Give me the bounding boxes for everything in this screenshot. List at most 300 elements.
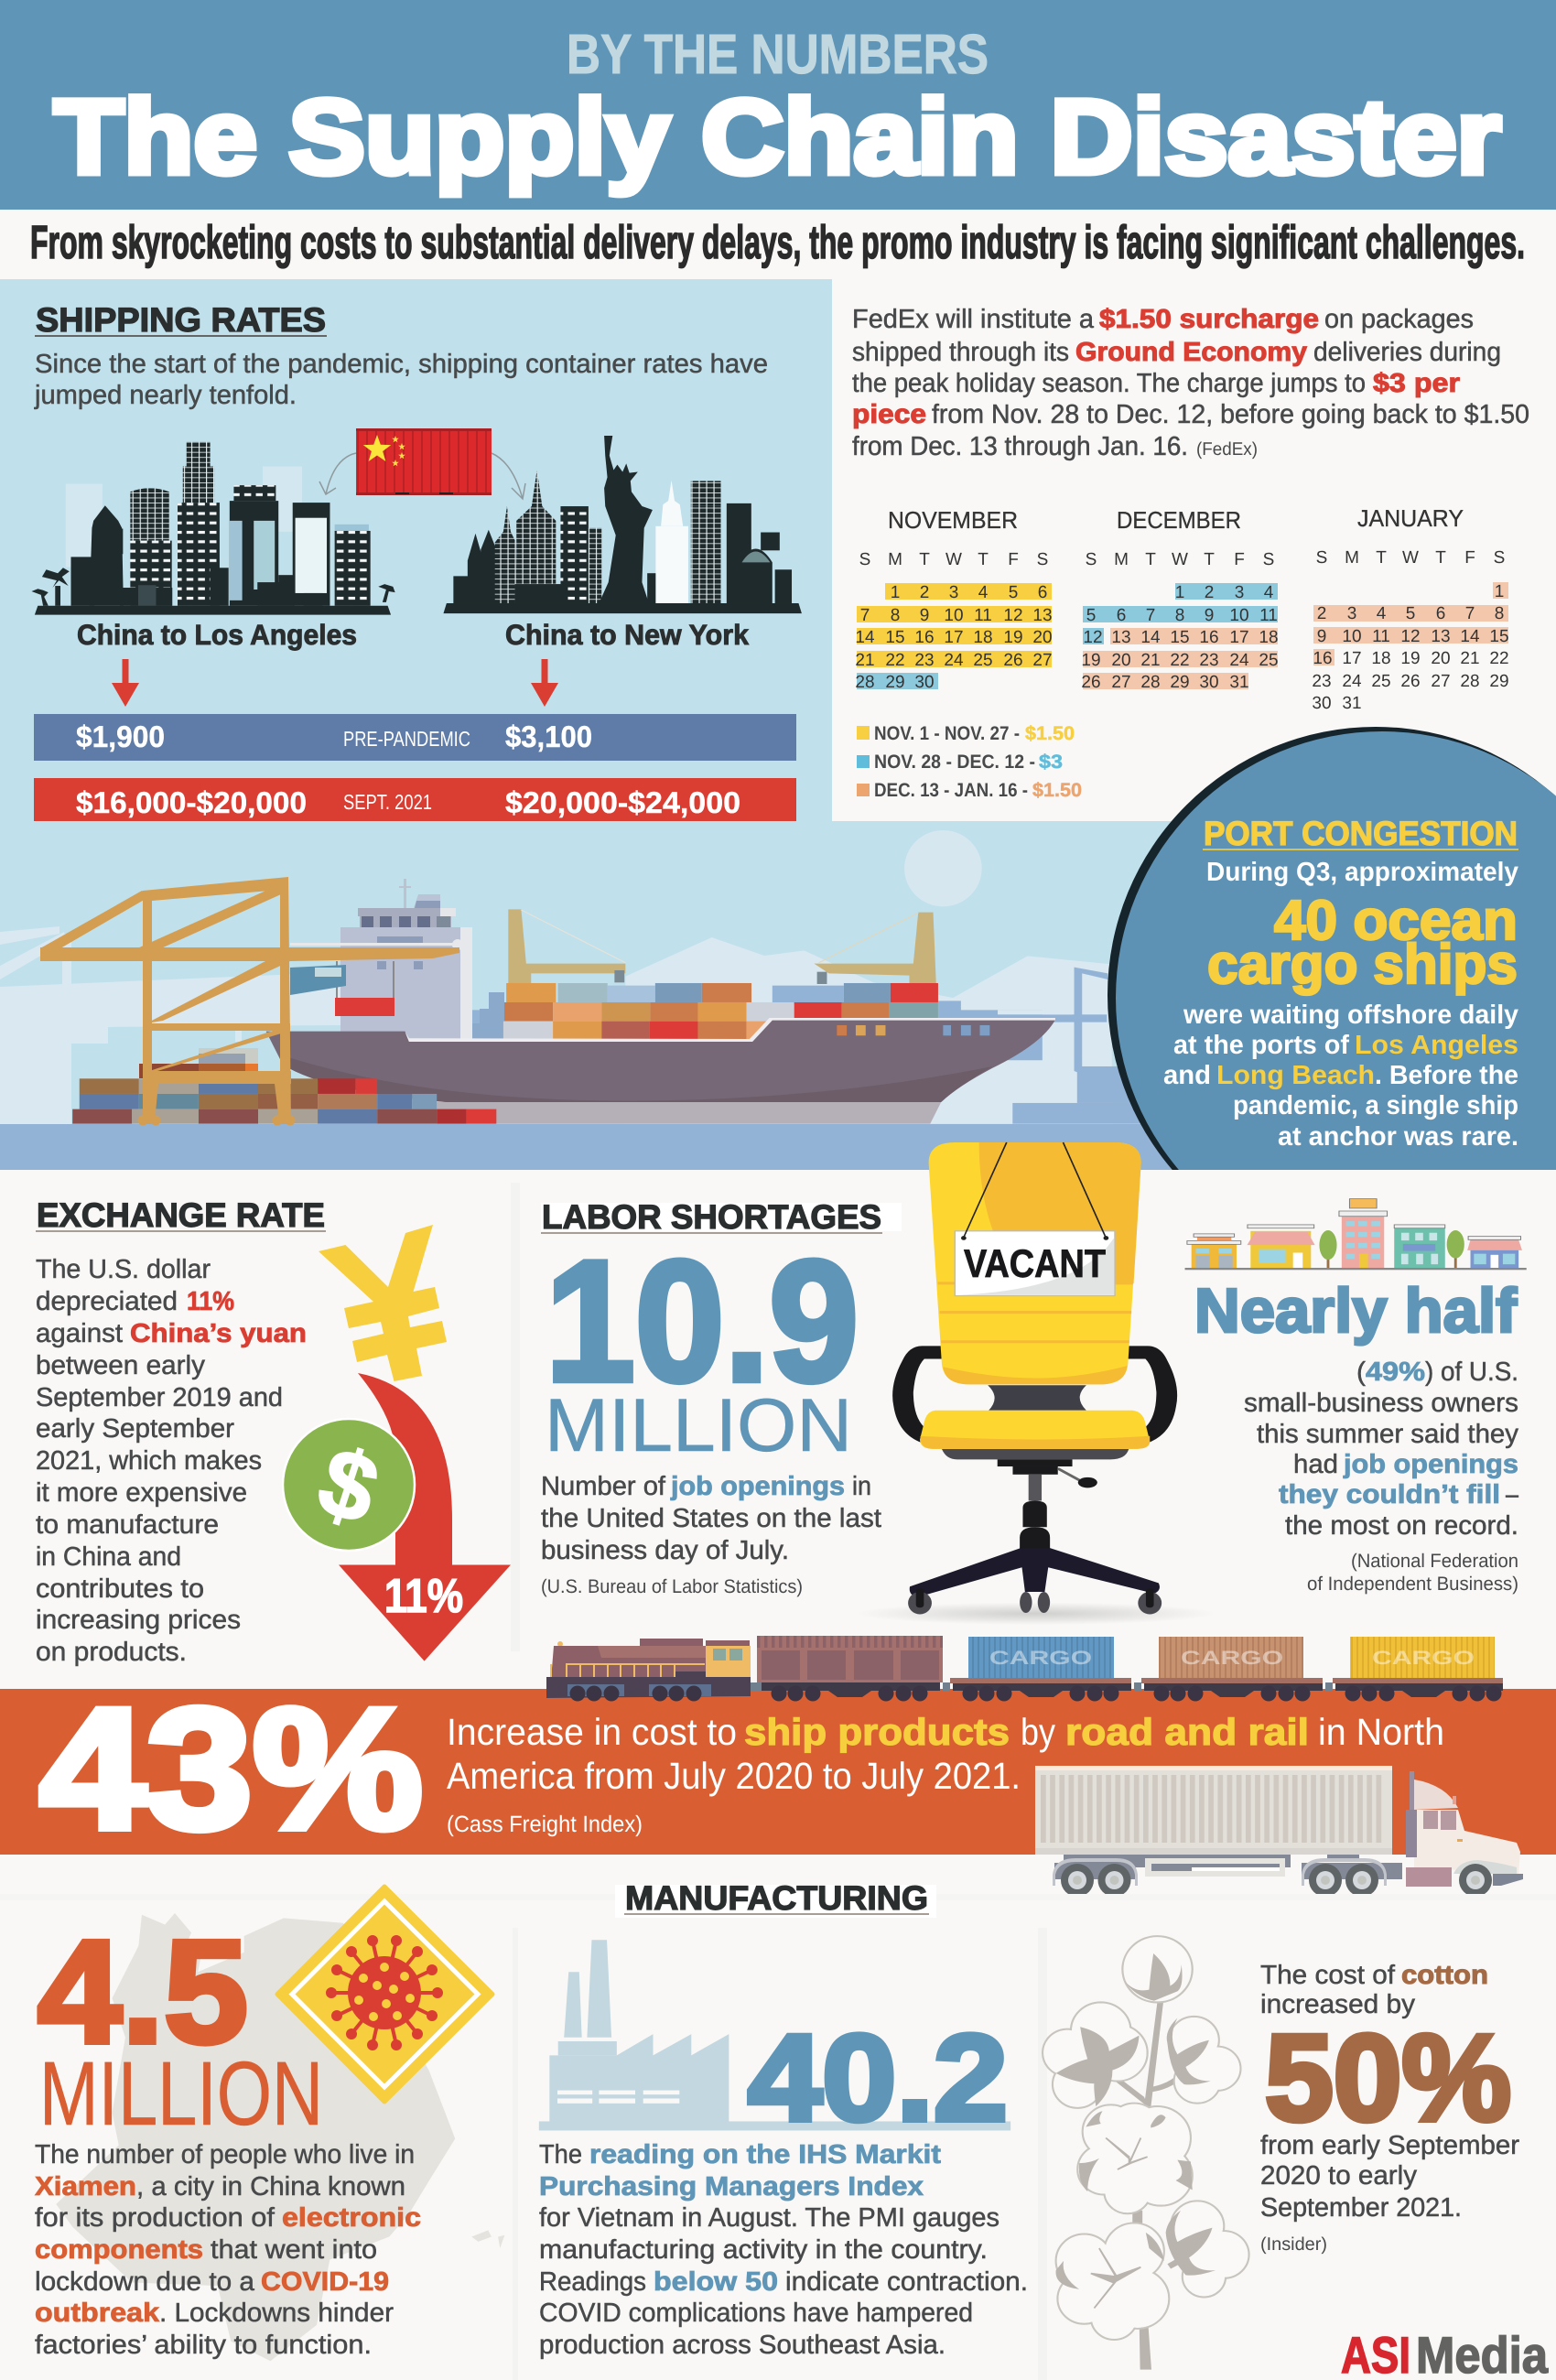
panel: small business <box>1185 1199 1527 1595</box>
bar: September 2021 rates: $16,000-$20,000 <box>76 785 307 819</box>
text: FedEx surcharge: from Dec. 13 through Jan. 16. <box>852 432 1188 461</box>
calendar: January: S <box>1316 548 1327 568</box>
text: job openings <box>541 1472 881 1597</box>
text: PMI reading: Readings <box>539 2267 646 2297</box>
bar: pre-pandemic rates: PRE-PANDEMIC <box>343 727 470 751</box>
calendar: January: 2 <box>1317 604 1326 623</box>
kicker: by the numbers: BY THE NUMBERS <box>567 23 989 85</box>
text: job openings: Number of <box>541 1472 666 1501</box>
skyline: Los Angeles <box>31 442 395 615</box>
panel: Xiamen lockdown <box>35 1887 504 2361</box>
calendar legend: $1.50 <box>1025 723 1075 744</box>
text: small business owners: ( <box>1356 1358 1366 1387</box>
text: cost of cotton <box>1260 1961 1488 2019</box>
calendar: November: W <box>945 550 962 569</box>
text: Xiamen: electronic <box>282 2203 421 2233</box>
calendar: November: 15 <box>885 628 905 647</box>
text: PMI reading: below 50 <box>654 2267 778 2297</box>
text: PMI reading: production across Southeast Asia. <box>539 2331 945 2360</box>
panel: cotton <box>1043 1936 1549 2380</box>
calendar: November: 6 <box>1038 583 1047 602</box>
calendar: December: 9 <box>1205 606 1214 625</box>
calendar: January: 25 <box>1371 672 1391 691</box>
calendar: November: 9 <box>920 606 929 625</box>
text: exchange rate body: between early <box>36 1351 206 1380</box>
stat: 50 percent: 50% <box>1265 2010 1511 2147</box>
illustration: semi truck <box>1035 1766 1523 1897</box>
calendar: December: 16 <box>1199 628 1219 647</box>
big text: 40 ocean cargo ships <box>1207 889 1518 995</box>
calendar: December: 24 <box>1229 651 1249 670</box>
text: FedEx surcharge: $3 per <box>1373 369 1460 398</box>
icon: dollar coin: $ <box>307 1427 390 1545</box>
calendar: November: NOVEMBER <box>888 506 1018 534</box>
text: offshore detail: and <box>1163 1061 1211 1090</box>
text: cost increase: Increase in cost to <box>447 1711 737 1753</box>
text: exchange rate body: it more expensive <box>36 1478 247 1508</box>
big text: 40 ocean cargo ships: cargo ships <box>1207 933 1518 995</box>
calendar: December: 28 <box>1140 673 1161 692</box>
calendar: December: W <box>1172 550 1188 569</box>
text: Xiamen: lockdown due to a <box>35 2267 255 2297</box>
stat unit: million: MILLION <box>39 2042 323 2144</box>
text: Xiamen: Xiamen <box>35 2172 136 2202</box>
calendar: January: 10 <box>1342 627 1362 646</box>
calendar: December: 5 <box>1086 606 1096 625</box>
text: exchange rate body: September 2019 and <box>36 1383 283 1412</box>
text: exchange rate body: early September <box>36 1414 234 1444</box>
text: exchange rate body: depreciated <box>36 1287 178 1316</box>
text: PMI reading: COVID complications have hampered <box>539 2299 973 2328</box>
calendar: November: 17 <box>944 628 964 647</box>
text: small business owners: this summer said they <box>1257 1420 1519 1449</box>
calendar legend <box>857 723 1082 801</box>
text: small business owners: – <box>1506 1480 1519 1509</box>
calendar: November: 2 <box>920 583 929 602</box>
calendar: January: 11 <box>1372 627 1390 646</box>
calendar: December: T <box>1145 550 1156 569</box>
calendar legend: NOV. 28 - DEC. 12 - <box>874 752 1035 773</box>
text: exchange rate body: contributes to <box>36 1574 204 1604</box>
text: Xiamen <box>35 2140 421 2360</box>
text: small business owners: the most on record. <box>1285 1511 1518 1541</box>
pale background cranes <box>0 926 340 1124</box>
calendar: January: 12 <box>1400 627 1421 646</box>
text: Xiamen: The number of people who live in <box>35 2140 415 2169</box>
calendar: December: 12 <box>1083 628 1103 647</box>
text: small business owners: 49% <box>1366 1358 1425 1387</box>
calendar: November: 7 <box>860 606 870 625</box>
text: FedEx surcharge: Ground Economy <box>1075 338 1307 367</box>
calendar: January: 24 <box>1342 672 1362 691</box>
big text: 40 ocean cargo ships: 40 ocean <box>1274 889 1518 951</box>
calendar: January: 19 <box>1400 649 1421 668</box>
calendar: November: 28 <box>855 673 875 692</box>
calendar: December: 20 <box>1111 651 1131 670</box>
calendar: November: 25 <box>973 651 993 670</box>
text: job openings: the United States on the last <box>541 1504 881 1533</box>
map: Xiamen outline <box>56 1913 504 2361</box>
calendar: December: 21 <box>1140 651 1161 670</box>
illustration: vacant office chair <box>857 1142 1216 1625</box>
calendar: December: 22 <box>1170 651 1190 670</box>
text: cost increase: (Cass Freight Index) <box>447 1812 643 1837</box>
calendar: January: 26 <box>1400 672 1421 691</box>
calendar: December: 15 <box>1170 628 1190 647</box>
calendar: January: 1 <box>1495 582 1504 601</box>
heading: exchange rate: EXCHANGE RATE <box>37 1196 325 1234</box>
calendar: January: T <box>1376 548 1387 568</box>
text: FedEx surcharge: FedEx will institute a <box>852 305 1095 334</box>
text: PMI reading: indicate contraction. <box>785 2267 1028 2297</box>
calendar: November: 22 <box>885 651 905 670</box>
panel: FedEx surcharge <box>832 279 1556 821</box>
text: offshore detail: . Before the <box>1375 1061 1518 1090</box>
calendar: January: JANUARY <box>1357 504 1464 532</box>
calendar: December: 14 <box>1140 628 1161 647</box>
text: cost increase: ship products <box>744 1711 1010 1753</box>
illustration: port scene <box>0 821 1556 1170</box>
calendar: December: S <box>1086 550 1097 569</box>
yellow container car <box>1325 1637 1503 1701</box>
icon: virus warning sign <box>277 1887 492 2102</box>
container labels <box>989 1648 1475 1669</box>
text: cost increase: America from July 2020 to July 2021. <box>447 1755 1021 1797</box>
bar: September 2021 rates: SEPT. 2021 <box>343 790 432 814</box>
calendar: January: 13 <box>1431 627 1451 646</box>
calendar: January: 7 <box>1465 604 1475 623</box>
locomotive <box>546 1639 751 1701</box>
text: exchange rate body: 11% <box>187 1287 234 1316</box>
calendar: January: 6 <box>1436 604 1445 623</box>
text: FedEx surcharge: (FedEx) <box>1196 439 1258 460</box>
divider: exchange and labor columns <box>511 1183 520 1651</box>
calendar: January: 28 <box>1460 672 1480 691</box>
calendar: January: 16 <box>1313 649 1333 668</box>
text: FedEx surcharge: from Nov. 28 to Dec. 12, before going back to $1.50 <box>932 400 1529 429</box>
calendar: January: S <box>1494 548 1505 568</box>
curved arrow to New York <box>492 453 525 499</box>
calendar: January: 30 <box>1312 694 1332 713</box>
bar: pre-pandemic rates <box>34 714 796 761</box>
calendar: December: 29 <box>1170 673 1190 692</box>
text: exchange rate body: 2021, which makes <box>36 1446 262 1476</box>
text: PMI reading: The <box>539 2140 582 2169</box>
text: job openings: job openings <box>670 1472 845 1501</box>
text: PMI reading: for Vietnam in August. The PMI gauges <box>539 2203 1000 2233</box>
text: job openings: business day of July. <box>541 1536 789 1565</box>
calendar: December <box>1081 506 1279 692</box>
cargo ship <box>266 879 1055 1124</box>
intro text <box>34 350 768 410</box>
calendar: November: F <box>1008 550 1019 569</box>
calendar: November: 11 <box>974 606 992 625</box>
calendar: January: 4 <box>1377 604 1387 623</box>
calendar: January: 20 <box>1431 649 1451 668</box>
text: small business owners: ) of U.S. <box>1425 1358 1518 1387</box>
text: exchange rate body <box>36 1255 307 1667</box>
text: FedEx surcharge: the peak holiday season. The charge jumps to <box>852 369 1366 398</box>
label: China to New York: China to New York <box>505 619 750 651</box>
text: cost increase: by <box>1021 1711 1055 1753</box>
text: exchange rate body: on products. <box>36 1638 187 1667</box>
text: job openings: (U.S. Bureau of Labor Statistics) <box>541 1576 803 1597</box>
text: cost increase: in North <box>1318 1711 1444 1753</box>
panel: exchange rate <box>36 1196 511 1667</box>
heading: nearly half: Nearly half <box>1194 1276 1517 1346</box>
calendar: November: 29 <box>885 673 905 692</box>
calendar: December: S <box>1263 550 1274 569</box>
calendar: December: 23 <box>1199 651 1219 670</box>
stat: 43 percent: 43% <box>39 1672 423 1865</box>
text: small business owners <box>1244 1358 1519 1595</box>
text: Xiamen: factories’ ability to function. <box>35 2331 372 2360</box>
text: PMI reading <box>539 2140 1028 2360</box>
calendar: December: 2 <box>1205 583 1214 602</box>
logo: ASI Media <box>1341 2326 1549 2380</box>
text: cotton timeframe: 2020 to early <box>1260 2161 1418 2191</box>
calendar: January: 5 <box>1406 604 1415 623</box>
text: cotton timeframe: September 2021. <box>1260 2193 1462 2223</box>
text: job openings: in <box>852 1472 871 1501</box>
calendar: November: S <box>859 550 870 569</box>
calendar: November: 3 <box>949 583 958 602</box>
text: Xiamen: outbreak <box>35 2299 160 2328</box>
calendar: January: W <box>1402 548 1419 568</box>
divider: lower right <box>1038 1928 1047 2380</box>
text: offshore detail: at the ports of <box>1173 1031 1349 1060</box>
calendar: December: M <box>1114 550 1129 569</box>
calendar: November: 13 <box>1032 606 1053 625</box>
arrow: Los Angeles <box>112 659 139 707</box>
dock containers <box>72 1048 496 1124</box>
calendar: December: 7 <box>1146 606 1155 625</box>
bar: pre-pandemic rates: $1,900 <box>76 719 165 753</box>
dock crane <box>40 877 463 1126</box>
text: exchange rate body: against <box>36 1319 123 1348</box>
text: FedEx surcharge: on packages <box>1324 305 1474 334</box>
sign text: vacant: VACANT <box>964 1242 1106 1286</box>
text: cost of cotton: The cost of <box>1260 1961 1396 1990</box>
text: FedEx surcharge: shipped through its <box>852 338 1069 367</box>
calendar: November: 16 <box>914 628 935 647</box>
calendar: December: 19 <box>1081 651 1101 670</box>
calendar: January: 21 <box>1460 649 1480 668</box>
icon: factory <box>539 1940 1010 2130</box>
calendar: November: 12 <box>1003 606 1023 625</box>
calendar legend: $3 <box>1039 752 1063 773</box>
text: small business owners: small-business owners <box>1244 1389 1518 1418</box>
calendar: November: 10 <box>944 606 964 625</box>
calendar: November: 20 <box>1032 628 1053 647</box>
calendar: January: 17 <box>1342 649 1362 668</box>
calendar: November: 30 <box>914 673 935 692</box>
text: offshore detail: Long Beach <box>1216 1061 1375 1090</box>
illustration: cotton plant <box>1043 1936 1249 2370</box>
calendar: December: 6 <box>1117 606 1126 625</box>
heading: port congestion: PORT CONGESTION <box>1204 815 1518 852</box>
bar: September 2021 rates: $20,000-$24,000 <box>505 785 740 819</box>
calendar: January: 29 <box>1489 672 1509 691</box>
text: offshore detail: pandemic, a single ship <box>1233 1091 1518 1120</box>
stat: 10.9: 10.9 <box>546 1225 859 1417</box>
main title: The Supply Chain Disaster <box>54 79 1501 196</box>
calendar: December: T <box>1204 550 1215 569</box>
calendar: November: M <box>888 550 902 569</box>
calendar: November: 14 <box>855 628 875 647</box>
calendar: November: 26 <box>1003 651 1023 670</box>
text: PMI reading: manufacturing activity in the country. <box>539 2235 988 2265</box>
blue container car <box>943 1637 1131 1701</box>
header banner <box>0 0 1556 210</box>
illustration: small storefronts <box>1185 1199 1527 1270</box>
heading: labor shortages: LABOR SHORTAGES <box>542 1198 881 1236</box>
text: exchange rate body: China’s yuan <box>130 1319 307 1348</box>
text: cotton timeframe: from early September <box>1260 2131 1519 2160</box>
intro text: jumped nearly tenfold. <box>34 381 297 410</box>
arrow: New York <box>531 659 558 707</box>
calendar: November: 4 <box>978 583 989 602</box>
calendar: January: 18 <box>1371 649 1391 668</box>
text: PMI reading: reading on the IHS Markit <box>589 2140 941 2169</box>
text: small business owners: job openings <box>1343 1450 1518 1479</box>
panel: labor shortages <box>541 1198 902 1597</box>
text: cost of cotton: cotton <box>1401 1961 1488 1990</box>
calendar: November: T <box>978 550 989 569</box>
divider: lower left <box>513 1928 518 2380</box>
text: PMI reading: Purchasing Managers Index <box>539 2172 924 2202</box>
calendar: January: 14 <box>1460 627 1480 646</box>
calendar: January: M <box>1345 548 1359 568</box>
text: Xiamen: components <box>35 2235 203 2265</box>
icon: yen symbol <box>319 1225 447 1381</box>
calendar: January: 15 <box>1489 627 1509 646</box>
calendar: December: 3 <box>1235 583 1244 602</box>
bar: September 2021 rates <box>34 778 796 824</box>
calendar: December: DECEMBER <box>1117 506 1241 534</box>
text: cotton timeframe <box>1260 2131 1519 2255</box>
text: offshore detail: at anchor was rare. <box>1278 1122 1518 1152</box>
calendar: December: 1 <box>1175 583 1184 602</box>
stat: 4.5: 4.5 <box>38 1909 248 2073</box>
text: during Q3: During Q3, approximately <box>1206 858 1518 887</box>
calendar: December: 8 <box>1175 606 1184 625</box>
label: China to Los Angeles: China to Los Angeles <box>77 619 357 651</box>
calendar: December: 10 <box>1229 606 1249 625</box>
calendar: January: 23 <box>1312 672 1332 691</box>
icon: dollar coin <box>283 1419 415 1551</box>
text: Xiamen: , a city in China known <box>136 2172 405 2202</box>
heading: shipping rates: SHIPPING RATES <box>36 301 326 339</box>
calendar: November: S <box>1037 550 1048 569</box>
text: small business owners: (National Federation <box>1351 1551 1518 1572</box>
calendar: January: 22 <box>1489 649 1509 668</box>
calendar: December: 27 <box>1111 673 1131 692</box>
text: cost of cotton: increased by <box>1260 1990 1416 2019</box>
text: exchange rate body: increasing prices <box>36 1606 241 1635</box>
calendar: December: 13 <box>1111 628 1131 647</box>
calendar: November: 8 <box>891 606 900 625</box>
calendar legend: DEC. 13 - JAN. 16 - <box>874 780 1028 801</box>
band: road and rail cost <box>0 1672 1556 1865</box>
calendar: January: 9 <box>1317 627 1326 646</box>
text: exchange rate body: The U.S. dollar <box>36 1255 211 1284</box>
stat unit: million: MILLION <box>545 1384 852 1467</box>
text: cost increase: road and rail <box>1065 1711 1309 1753</box>
skyline: New York <box>443 436 802 613</box>
label: 11 percent: 11% <box>384 1570 463 1623</box>
hopper wagon <box>751 1636 943 1701</box>
calendar: November: 1 <box>891 583 900 602</box>
calendar: January <box>1312 504 1509 713</box>
heading: manufacturing: MANUFACTURING <box>625 1879 928 1917</box>
inner fill removes interior boll lines <box>1043 2003 1248 2339</box>
calendar: January: 27 <box>1431 672 1451 691</box>
calendar: November: 23 <box>914 651 935 670</box>
calendar: December: 18 <box>1259 628 1279 647</box>
calendar: January: F <box>1464 548 1475 568</box>
text: FedEx surcharge: deliveries during <box>1313 338 1501 367</box>
calendar: December: F <box>1234 550 1245 569</box>
text: cost increase <box>447 1711 1444 1837</box>
calendar: November: T <box>919 550 930 569</box>
panel: shipping rates <box>0 279 832 824</box>
calendar: November: 21 <box>855 651 875 670</box>
calendar: December: 4 <box>1264 583 1274 602</box>
text: FedEx surcharge: piece <box>852 400 926 429</box>
calendar: November: 19 <box>1003 628 1023 647</box>
orange container car <box>1134 1637 1323 1701</box>
arrow: falling exchange rate <box>339 1373 511 1661</box>
calendar: December: 11 <box>1259 606 1278 625</box>
calendar: December: 17 <box>1229 628 1249 647</box>
sea band <box>0 1124 1556 1170</box>
curved arrow to Los Angeles <box>319 453 356 494</box>
text: small business owners: of Independent Business) <box>1307 1574 1518 1595</box>
text: FedEx surcharge: $1.50 surcharge <box>1099 305 1319 334</box>
panel: Vietnam PMI <box>539 1940 1028 2360</box>
container labels: CARGO <box>989 1648 1092 1669</box>
calendar legend: $1.50 <box>1032 780 1082 801</box>
intro text: Since the start of the pandemic, shipping container rates have <box>35 350 768 379</box>
panel: port congestion <box>1108 727 1556 1170</box>
calendar: December: 25 <box>1259 651 1279 670</box>
text: cotton timeframe: (Insider) <box>1260 2234 1327 2255</box>
calendar: November <box>855 506 1053 692</box>
icon: China flag container <box>356 428 492 495</box>
stat: 40.2: 40.2 <box>748 2010 1008 2147</box>
text: exchange rate body: to manufacture <box>36 1510 219 1540</box>
text: exchange rate body: in China and <box>36 1542 181 1572</box>
text: FedEx surcharge <box>852 305 1529 461</box>
calendar: January: T <box>1435 548 1446 568</box>
text: small business owners: they couldn’t fill <box>1279 1480 1500 1509</box>
section rule: manufacturing <box>0 1894 1556 1900</box>
calendar: November: 18 <box>973 628 993 647</box>
text: offshore detail: were waiting offshore daily <box>1183 1001 1518 1030</box>
calendar: January: 3 <box>1347 604 1356 623</box>
text: offshore detail: Los Angeles <box>1355 1031 1518 1060</box>
bar: pre-pandemic rates: $3,100 <box>505 719 592 753</box>
container labels: CARGO <box>1181 1648 1283 1669</box>
illustration: freight train <box>546 1636 1503 1701</box>
calendar legend: NOV. 1 - NOV. 27 - <box>874 723 1020 744</box>
calendar: December: 31 <box>1229 673 1249 692</box>
calendar: November: 24 <box>944 651 964 670</box>
text: Xiamen: . Lockdowns hinder <box>159 2299 394 2328</box>
text: Xiamen: COVID-19 <box>261 2267 389 2297</box>
text: offshore detail <box>1163 1001 1518 1152</box>
